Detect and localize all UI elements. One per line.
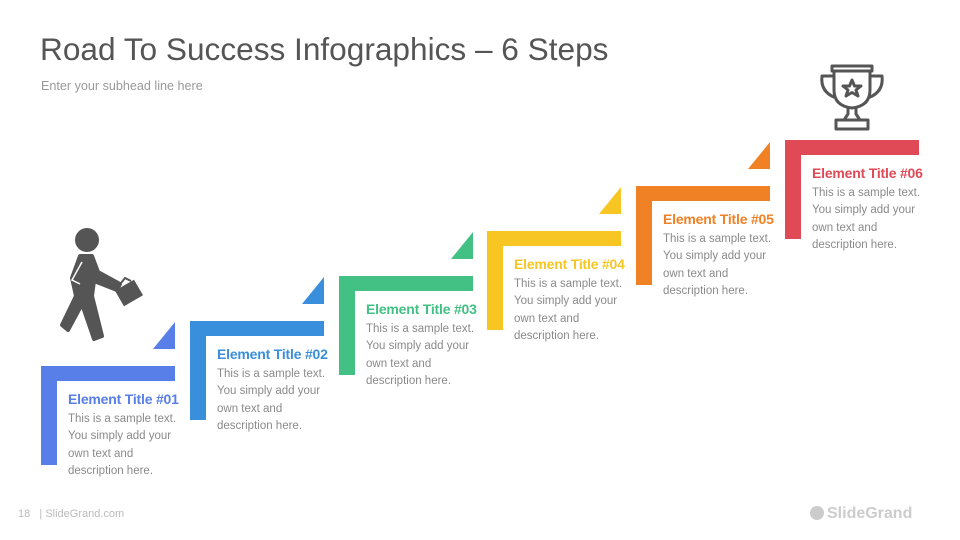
title: Road To Success Infographics – 6 Steps [40, 31, 608, 67]
step 2: You simply add your [217, 385, 320, 397]
step 6 [785, 140, 923, 251]
step 3: Element Title #03 [366, 301, 477, 317]
step 4: You simply add your [514, 295, 617, 307]
step 6: Element Title #06 [812, 165, 923, 181]
step 3: You simply add your [366, 340, 469, 352]
step 1: This is a sample text. [68, 413, 176, 425]
step 4: own text and [514, 313, 579, 325]
step 4: This is a sample text. [514, 278, 622, 290]
step 1: You simply add your [68, 430, 171, 442]
step 5 [636, 142, 774, 297]
step 3: description here. [366, 375, 451, 387]
step 5: Element Title #05 [663, 211, 774, 227]
step 1: Element Title #01 [68, 391, 179, 407]
step 6: You simply add your [812, 204, 915, 216]
step 3 [339, 232, 477, 387]
step 5: This is a sample text. [663, 233, 771, 245]
step 5: You simply add your [663, 250, 766, 262]
icon: trophy [820, 64, 884, 130]
step 2: This is a sample text. [217, 368, 325, 380]
step 3: This is a sample text. [366, 323, 474, 335]
subtitle: Enter your subhead line here [41, 79, 203, 93]
step 5: own text and [663, 268, 728, 280]
step 4: Element Title #04 [514, 256, 625, 272]
step 6: own text and [812, 222, 877, 234]
step 2: description here. [217, 420, 302, 432]
step 2: own text and [217, 403, 282, 415]
icon: walking businessman [60, 228, 143, 342]
step 1 [41, 322, 179, 477]
step 4 [487, 187, 625, 342]
step 1: own text and [68, 448, 133, 460]
step 2 [190, 277, 328, 432]
step 6: description here. [812, 239, 897, 251]
step 5: description here. [663, 285, 748, 297]
step 4: description here. [514, 330, 599, 342]
step 6: This is a sample text. [812, 187, 920, 199]
footer: page number: 18 | SlideGrand.com [18, 508, 124, 520]
step 2: Element Title #02 [217, 346, 328, 362]
step 1: description here. [68, 465, 153, 477]
step 3: own text and [366, 358, 431, 370]
footer: logo: SlideGrand [827, 505, 912, 522]
